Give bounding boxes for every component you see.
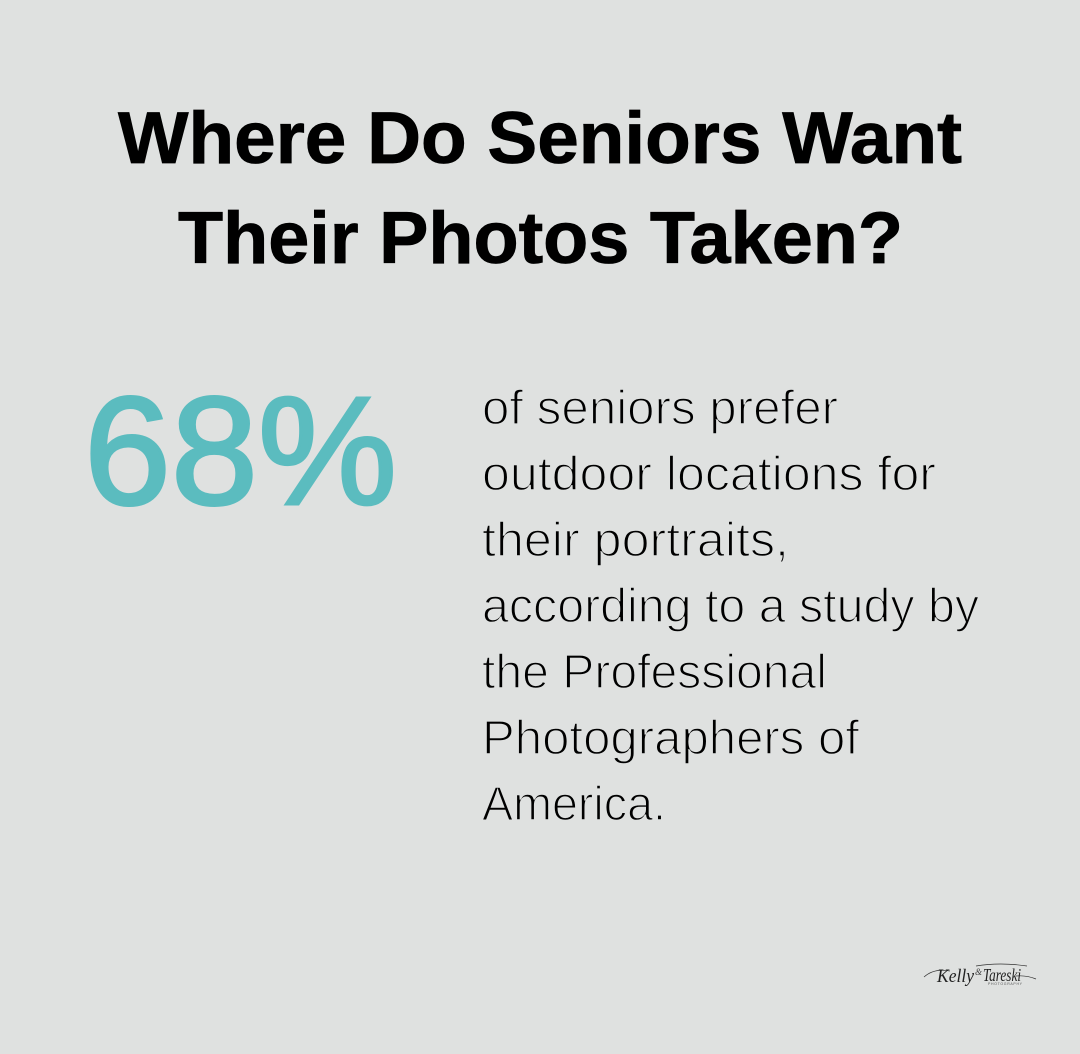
- logo: Kelly & Tareski Photography signature: &: [975, 967, 982, 977]
- big statistic: 68%: 68%: [84, 365, 397, 537]
- logo: Kelly & Tareski Photography signature: Tareski: [983, 965, 1021, 985]
- title: Where Do Seniors Want: [118, 98, 962, 179]
- statistic description: the Professional: [482, 646, 827, 699]
- statistic description: of seniors prefer: [482, 382, 838, 435]
- statistic description: outdoor locations for: [482, 448, 936, 501]
- logo: Kelly & Tareski Photography signature: Kelly: [936, 966, 975, 987]
- statistic description: according to a study by: [482, 580, 979, 633]
- logo: Kelly & Tareski Photography signature: PHOTOGRAPHY: [988, 982, 1023, 986]
- statistic description: [482, 382, 979, 831]
- logo: Kelly & Tareski Photography signature: [924, 964, 1036, 987]
- title: [118, 98, 962, 279]
- statistic description: their portraits,: [482, 514, 789, 567]
- statistic description: America.: [482, 778, 666, 831]
- title: Their Photos Taken?: [178, 198, 903, 279]
- statistic description: Photographers of: [482, 712, 860, 765]
